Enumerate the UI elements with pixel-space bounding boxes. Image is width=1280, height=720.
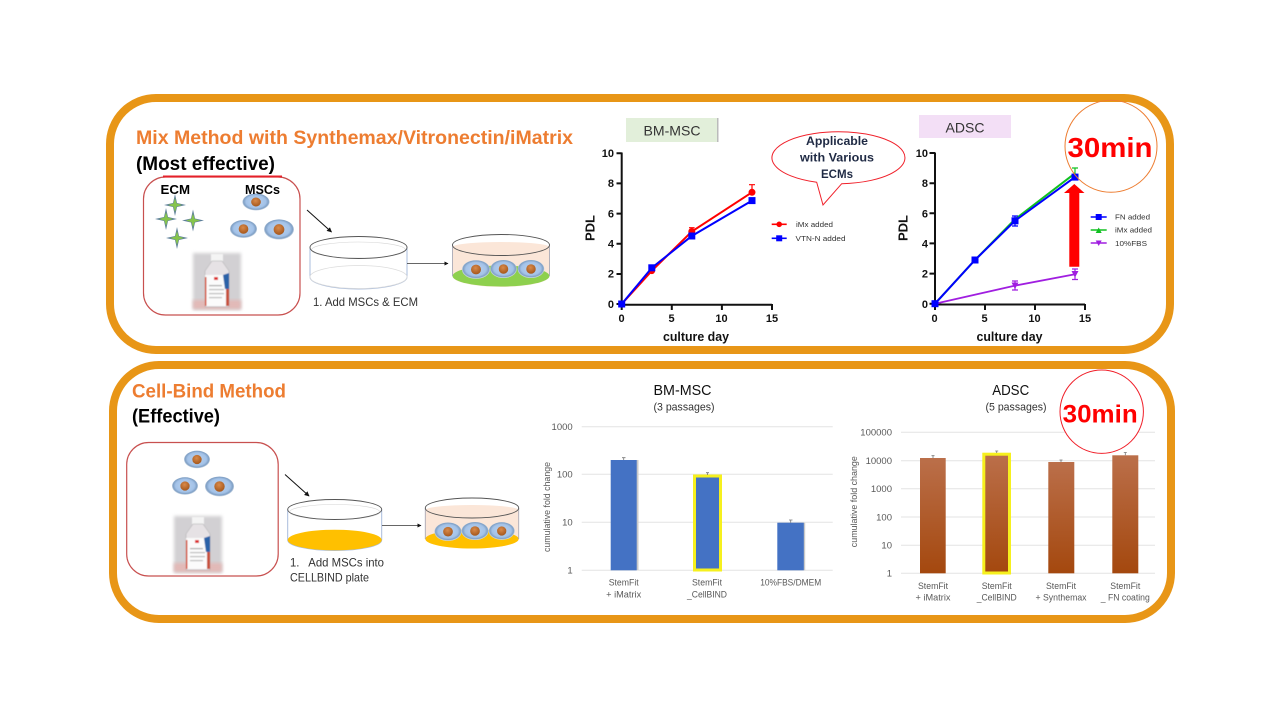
bar chart: BM-MSC cumulative fold change [542, 383, 833, 599]
line chart: BM-MSC PDL: 4 [608, 238, 615, 250]
caption: add MSCs into CELLBIND plate [290, 556, 384, 585]
bar chart: ADSC cumulative fold change: 100 [876, 512, 892, 523]
callout: applicable with various ECMs: with Various [799, 151, 874, 165]
label: ADSC: ADSC [946, 120, 984, 136]
bar chart: ADSC cumulative fold change: StemFit [1110, 581, 1141, 591]
ingredients box: MSCs and medium [127, 442, 278, 576]
bar chart: ADSC cumulative fold change: + iMatrix [916, 593, 951, 603]
line chart: ADSC PDL: 0 [931, 313, 938, 325]
chart subtitle: 5 passages: (5 passages) [986, 402, 1046, 414]
arrow: dish to result [382, 524, 421, 526]
panel border: cell-bind method [113, 365, 1171, 619]
bar chart: BM-MSC cumulative fold change: StemFit [692, 578, 722, 588]
legend: BM-MSC chart: VTN-N added [796, 234, 846, 243]
bar: StemFit CellBIND highlighted [984, 451, 1010, 573]
bar: StemFit + iMatrix [611, 458, 638, 570]
line chart: ADSC PDL: 0 [922, 299, 928, 311]
line chart: ADSC PDL: PDL [896, 215, 910, 241]
bar chart: BM-MSC cumulative fold change: cumulative fold change [542, 462, 552, 552]
line chart: ADSC PDL [896, 148, 1091, 344]
line chart: ADSC PDL: 6 [922, 208, 928, 220]
line chart: BM-MSC PDL: PDL [582, 215, 598, 241]
series: iMx added [935, 168, 1078, 304]
panel: cell-bind method [113, 365, 1171, 619]
bar: StemFit + Synthemax [1048, 460, 1074, 573]
line chart: BM-MSC PDL: 0 [608, 299, 614, 311]
icon: CELLBIND dish [288, 500, 382, 550]
line chart: BM-MSC PDL [582, 148, 778, 344]
bar chart: ADSC cumulative fold change: _CellBIND [976, 593, 1017, 603]
icon: medium bottle [193, 253, 241, 310]
icon: empty dish [310, 236, 407, 289]
panel: mix method [110, 98, 1170, 350]
line chart: BM-MSC PDL: 6 [608, 208, 614, 220]
line chart: BM-MSC PDL: 5 [668, 313, 675, 325]
bar: StemFit + iMatrix [920, 456, 946, 573]
legend: BM-MSC chart: iMx added [796, 220, 833, 229]
line chart: BM-MSC PDL: 15 [766, 313, 778, 325]
bar chart: ADSC cumulative fold change: 1000 [871, 484, 892, 495]
bar chart: ADSC cumulative fold change: StemFit [1046, 581, 1076, 591]
line chart: ADSC PDL: 2 [922, 268, 928, 280]
bar chart: ADSC cumulative fold change: 10000 [866, 456, 892, 467]
line chart: ADSC PDL: 10 [916, 148, 928, 160]
bar chart: ADSC cumulative fold change: StemFit [982, 581, 1012, 591]
bar chart: BM-MSC cumulative fold change: 10 [562, 518, 573, 528]
line chart: BM-MSC PDL: 10 [602, 148, 614, 160]
bar chart: ADSC cumulative fold change: 1 [887, 568, 892, 580]
legend: ADSC chart: iMx added [1115, 226, 1152, 234]
label: ECM: ECM [160, 182, 190, 197]
callout: applicable with various ECMs [772, 132, 905, 205]
callout: applicable with various ECMs: ECMs [821, 167, 853, 181]
line chart: BM-MSC PDL: 2 [608, 268, 614, 280]
line chart: BM-MSC PDL: culture day [663, 330, 729, 344]
callout: applicable with various ECMs: Applicable [806, 134, 868, 148]
label: ADSC [919, 115, 1011, 138]
line chart: BM-MSC PDL: 8 [608, 178, 614, 190]
badge: 30min: 30min [1063, 400, 1138, 428]
caption: add MSCs into CELLBIND plate: CELLBIND plate [290, 571, 369, 585]
line chart: ADSC PDL: 4 [922, 238, 929, 250]
bar chart: ADSC cumulative fold change: 100000 [860, 428, 892, 438]
icon: medium bottle [174, 516, 222, 573]
line chart: ADSC PDL: 8 [922, 178, 928, 190]
icon: MSC cells [172, 451, 234, 496]
label: MSCs: MSCs [245, 182, 280, 197]
legend: ADSC chart: FN added [1115, 212, 1150, 222]
line chart: BM-MSC PDL: 10 [715, 313, 728, 325]
chart subtitle: 3 passages: (3 passages) [654, 402, 714, 414]
arrow: large red increase [1064, 184, 1084, 267]
bar chart: ADSC cumulative fold change [849, 383, 1155, 603]
chart title: ADSC: ADSC [992, 383, 1029, 399]
bar: 10%FBS/DMEM [777, 520, 805, 570]
label: BM-MSC [626, 118, 718, 142]
bar chart: BM-MSC cumulative fold change: _CellBIND [686, 589, 727, 599]
icon: ECM stars [155, 194, 204, 249]
series: 10%FBS [935, 269, 1078, 304]
bar chart: ADSC cumulative fold change: cumulative fold change [849, 456, 859, 547]
bar: StemFit FN coating [1112, 452, 1138, 573]
line chart: ADSC PDL: culture day [976, 330, 1043, 344]
series: VTN-N added [618, 197, 756, 308]
series: iMx added [622, 185, 756, 304]
bar chart: BM-MSC cumulative fold change: 10%FBS/DMEM [760, 578, 821, 588]
bar chart: BM-MSC cumulative fold change: 1 [567, 566, 573, 576]
arrow: into dish [307, 210, 332, 232]
bar: StemFit CellBIND highlighted [694, 473, 720, 570]
bar chart: BM-MSC cumulative fold change: StemFit [609, 578, 639, 588]
legend: ADSC chart: 10%FBS [1115, 239, 1147, 248]
caption: add MSCs into CELLBIND plate: 1. Add MSCs into [290, 556, 384, 570]
icon: MSC cells [230, 193, 294, 240]
badge: 30min: 30min [1068, 132, 1152, 163]
line chart: BM-MSC PDL: 0 [618, 313, 625, 325]
bar chart: ADSC cumulative fold change: 10 [881, 540, 892, 552]
label: BM-MSC: BM-MSC [644, 122, 700, 138]
arrow: dish to result [407, 262, 448, 264]
ingredients box: ECM and MSCs [144, 176, 300, 315]
bar chart: ADSC cumulative fold change: + Synthemax [1036, 593, 1087, 603]
heading: cell-bind method: Cell-Bind Method [132, 382, 286, 402]
panel border: mix method [110, 98, 1170, 350]
heading: mix method: Mix Method with Synthemax/Vitronectin/iMatrix [136, 128, 573, 149]
series: FN added [932, 174, 1078, 307]
badge: 30min [1065, 100, 1157, 192]
bar chart: ADSC cumulative fold change: StemFit [918, 581, 948, 591]
icon: dish with cells on green matrix [452, 234, 550, 287]
chart title: BM-MSC: BM-MSC [654, 383, 712, 399]
line chart: ADSC PDL: 5 [981, 313, 988, 325]
bar chart: BM-MSC cumulative fold change: 1000 [552, 422, 573, 433]
bar chart: BM-MSC cumulative fold change: 100 [557, 470, 573, 480]
bar chart: ADSC cumulative fold change: _ FN coating [1100, 593, 1150, 603]
subheading: effective: (Effective) [132, 406, 220, 428]
legend: ADSC chart [1091, 212, 1152, 248]
caption: add MSCs and ECM: 1. Add MSCs & ECM [313, 295, 418, 309]
icon: CELLBIND dish with cells [425, 498, 519, 548]
legend: BM-MSC chart [772, 220, 846, 243]
bar chart: BM-MSC cumulative fold change: + iMatrix [606, 589, 642, 599]
line chart: ADSC PDL: 15 [1079, 313, 1091, 325]
arrow: into CELLBIND dish [285, 474, 309, 496]
line chart: ADSC PDL: 10 [1028, 313, 1041, 325]
subheading: most effective: (Most effective) [136, 154, 275, 175]
badge: 30min [1060, 370, 1143, 453]
